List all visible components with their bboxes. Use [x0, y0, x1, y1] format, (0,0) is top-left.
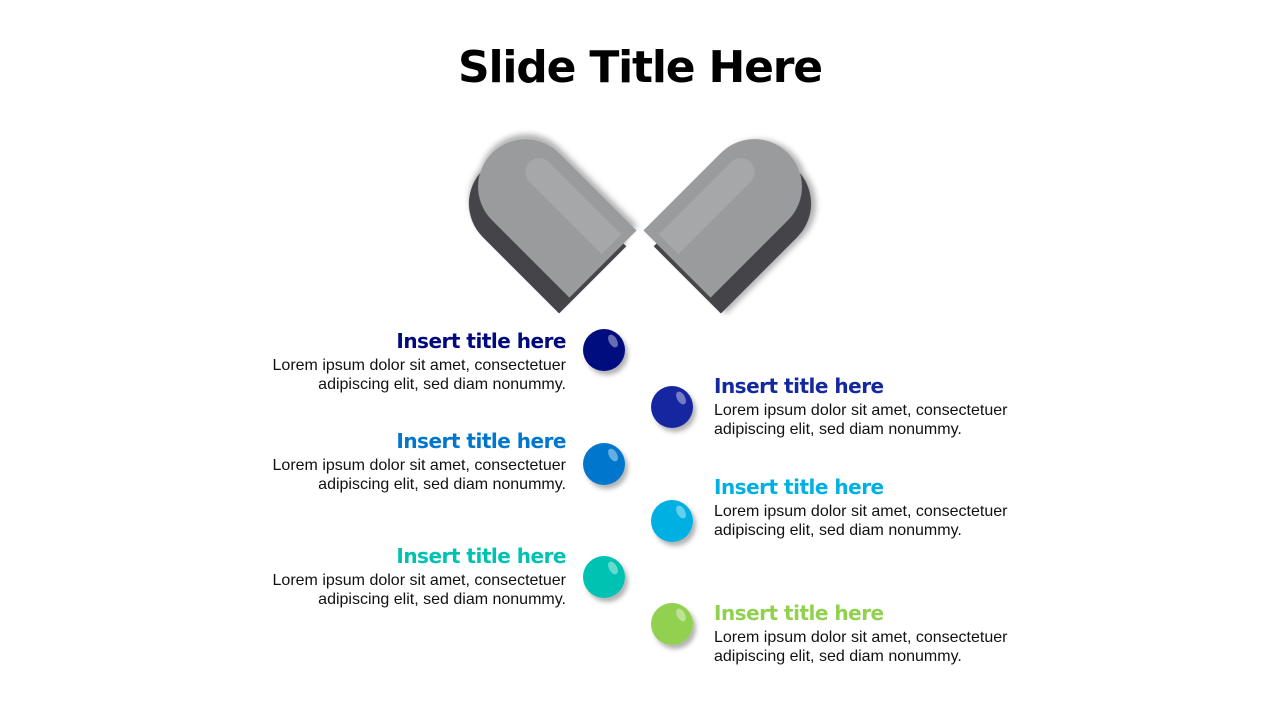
text block 2: Lorem ipsum dolor sit amet, consectetuer: [714, 402, 1007, 419]
text block 6: Lorem ipsum dolor sit amet, consectetuer: [714, 629, 1007, 646]
text block 1: [273, 329, 566, 393]
text block 4: Lorem ipsum dolor sit amet, consectetuer: [714, 503, 1007, 520]
text block 3: Lorem ipsum dolor sit amet, consectetuer: [273, 457, 566, 474]
right capsule half: [641, 119, 835, 313]
text block 6: adipiscing elit, sed diam nonummy.: [714, 648, 962, 665]
text block 1: adipiscing elit, sed diam nonummy.: [318, 376, 566, 393]
text block 5: Insert title here: [396, 544, 566, 568]
text block 5: adipiscing elit, sed diam nonummy.: [318, 591, 566, 608]
text block 5: [273, 544, 566, 608]
text block 4: [714, 475, 1008, 539]
text block 2: Insert title here: [714, 374, 884, 398]
title: Slide Title Here: [458, 42, 822, 93]
text block 2: adipiscing elit, sed diam nonummy.: [714, 421, 962, 438]
text block 6: [714, 601, 1008, 665]
text block 3: adipiscing elit, sed diam nonummy.: [318, 476, 566, 493]
text block 5: Lorem ipsum dolor sit amet, consectetuer: [273, 572, 566, 589]
text block 2: [714, 374, 1008, 438]
text block 3: Insert title here: [396, 429, 566, 453]
text block 4: adipiscing elit, sed diam nonummy.: [714, 522, 962, 539]
ball markers: [583, 329, 693, 645]
left capsule half: [445, 119, 639, 313]
text block 4: Insert title here: [714, 475, 884, 499]
text block 1: Insert title here: [396, 329, 566, 353]
text block 1: Lorem ipsum dolor sit amet, consectetuer: [273, 357, 566, 374]
text block 6: Insert title here: [714, 601, 884, 625]
text block 3: [273, 429, 566, 493]
